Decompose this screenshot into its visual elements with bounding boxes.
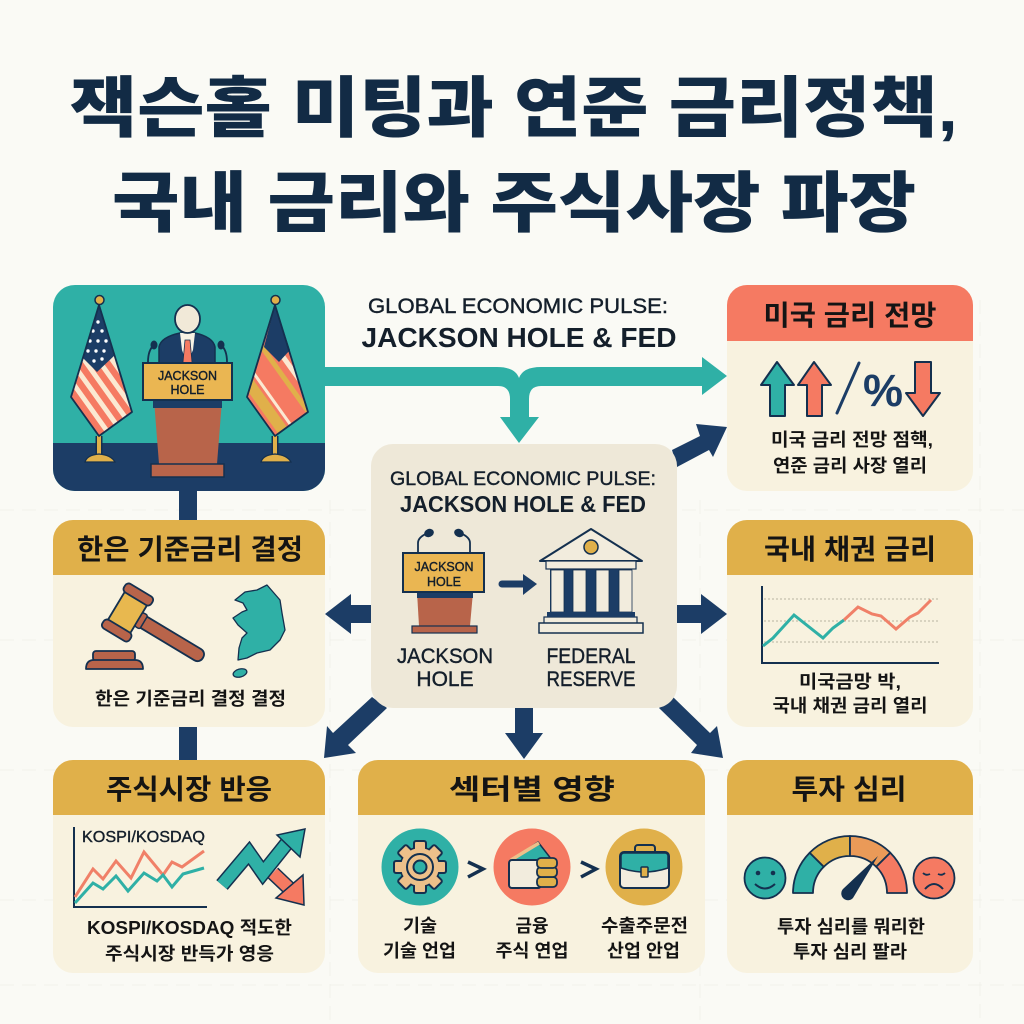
- chevron: [468, 862, 483, 877]
- heading: global economic pulse: GLOBAL ECONOMIC PULSE:: [368, 295, 668, 318]
- icon: market up and down arrows: [222, 829, 305, 905]
- icon: podium: [143, 363, 232, 477]
- label: technology: 기술: [403, 916, 437, 936]
- text: US rate summary: 연준 금리 사장 열리: [773, 456, 927, 476]
- arrow: center to upper right: [672, 424, 727, 467]
- label: Jackson Hole: JACKSON: [397, 645, 493, 668]
- text: US rate summary: 미국 금리 전망 점핵,: [771, 430, 933, 450]
- icon: wallet and coins in coral circle: [494, 828, 570, 906]
- arrow: teal branching connector: [320, 357, 727, 443]
- panel: Bank of Korea base rate: 한은 기준금리 결정: [77, 534, 303, 565]
- label: Jackson Hole: [397, 645, 493, 691]
- label: technology: [383, 916, 456, 961]
- icon: podium: JACKSON: [158, 369, 217, 383]
- icon: small podium: HOLE: [427, 575, 461, 589]
- icon: small podium: [403, 527, 484, 633]
- arrow: center to lower left: [324, 697, 387, 758]
- icon: speaker figure: [148, 305, 227, 366]
- label: finance: 주식 연업: [496, 941, 568, 961]
- text: base rate decision: 한은 기준금리 결정 결정: [95, 689, 286, 709]
- text: stock summary: 주식시장 반득가 영응: [105, 944, 274, 964]
- icon: rate arrows and percent: [761, 362, 940, 416]
- heading: global economic pulse: JACKSON HOLE & FED: [362, 322, 676, 353]
- text: sentiment summary: 투자 심리 팔라: [793, 942, 907, 962]
- panel: sector impact: [358, 760, 705, 973]
- text: sentiment summary: 투자 심리를 뭐리한: [777, 917, 925, 937]
- icon: rate arrows and percent: %: [863, 365, 903, 416]
- panel: center Jackson Hole and Fed: [371, 444, 677, 708]
- text: bond summary: [772, 672, 928, 716]
- title: 잭슨홀 미팅과 연준 금리정책,: [70, 71, 958, 145]
- panel: investor sentiment: 투자 심리: [792, 774, 906, 805]
- line chart: KOSPI and KOSDAQ: KOSPI/KOSDAQ: [82, 829, 205, 846]
- panel: domestic bond yields: [727, 520, 973, 727]
- title: 국내 금리와 주식사장 파장: [112, 166, 916, 240]
- panel: US rate outlook: [727, 285, 973, 491]
- line chart: bond yields: [762, 586, 939, 663]
- icon: smiley face: [744, 858, 786, 898]
- text: bond summary: 미국금망 박,: [799, 672, 901, 692]
- icon: briefcase in gold circle: [606, 828, 682, 906]
- text: US rate summary: [771, 430, 933, 476]
- icon: small podium: JACKSON: [414, 560, 474, 574]
- panel: stock market reaction: [53, 760, 325, 973]
- icon: Korea map: [232, 585, 285, 679]
- icon: gavel: [86, 582, 216, 680]
- panel: domestic bond yields: 국내 채권 금리: [764, 534, 936, 565]
- label: technology: 기술 언업: [383, 941, 456, 961]
- icon: second flag: [246, 294, 309, 462]
- arrow: center to bottom: [505, 704, 543, 759]
- line chart: KOSPI and KOSDAQ: [74, 827, 207, 907]
- icon: podium: HOLE: [170, 383, 205, 397]
- arrow: center to lower right: [659, 697, 723, 758]
- connector: navy vertical bars on left column: [179, 485, 197, 766]
- panel: stock market reaction: 주식시장 반응: [106, 774, 272, 805]
- icon: sad face: [914, 858, 954, 898]
- label: export: [601, 916, 688, 961]
- icon: federal reserve bank: [539, 529, 643, 633]
- panel: investor sentiment: [727, 760, 973, 973]
- panel: Bank of Korea base rate: [53, 520, 325, 727]
- label: Jackson Hole: HOLE: [416, 668, 474, 691]
- text: stock summary: KOSPI/KOSDAQ 적도한: [87, 918, 292, 938]
- label: finance: [496, 916, 568, 961]
- arrow: podium to bank: [502, 574, 537, 595]
- heading: global economic pulse: [362, 295, 676, 353]
- label: export: 수출주문전: [601, 916, 688, 936]
- center panel heading: [390, 468, 656, 517]
- center panel heading: GLOBAL ECONOMIC PULSE:: [390, 468, 656, 490]
- label: finance: 금융: [516, 916, 548, 936]
- text: stock summary: [87, 918, 292, 964]
- label: Federal Reserve: RESERVE: [546, 668, 636, 691]
- panel: speaker at Jackson Hole: [53, 285, 325, 491]
- panel: sector impact: 섹터별 영향: [449, 774, 615, 805]
- title: [70, 71, 958, 240]
- label: Federal Reserve: FEDERAL: [546, 645, 636, 668]
- text: sentiment summary: [777, 917, 925, 962]
- center panel heading: JACKSON HOLE & FED: [400, 491, 646, 517]
- gauge: sentiment meter: [793, 836, 907, 900]
- panel: US rate outlook: 미국 금리 전망: [764, 300, 936, 331]
- label: Federal Reserve: [546, 645, 636, 691]
- icon: American flag: [70, 294, 133, 462]
- icon: gear in teal circle: [382, 828, 458, 906]
- arrow: center to left: [325, 594, 375, 634]
- chevron: [581, 862, 596, 877]
- label: export: 산업 안업: [607, 941, 680, 961]
- text: bond summary: 국내 채권 금리 열리: [772, 696, 928, 716]
- arrow: center to right: [673, 594, 727, 634]
